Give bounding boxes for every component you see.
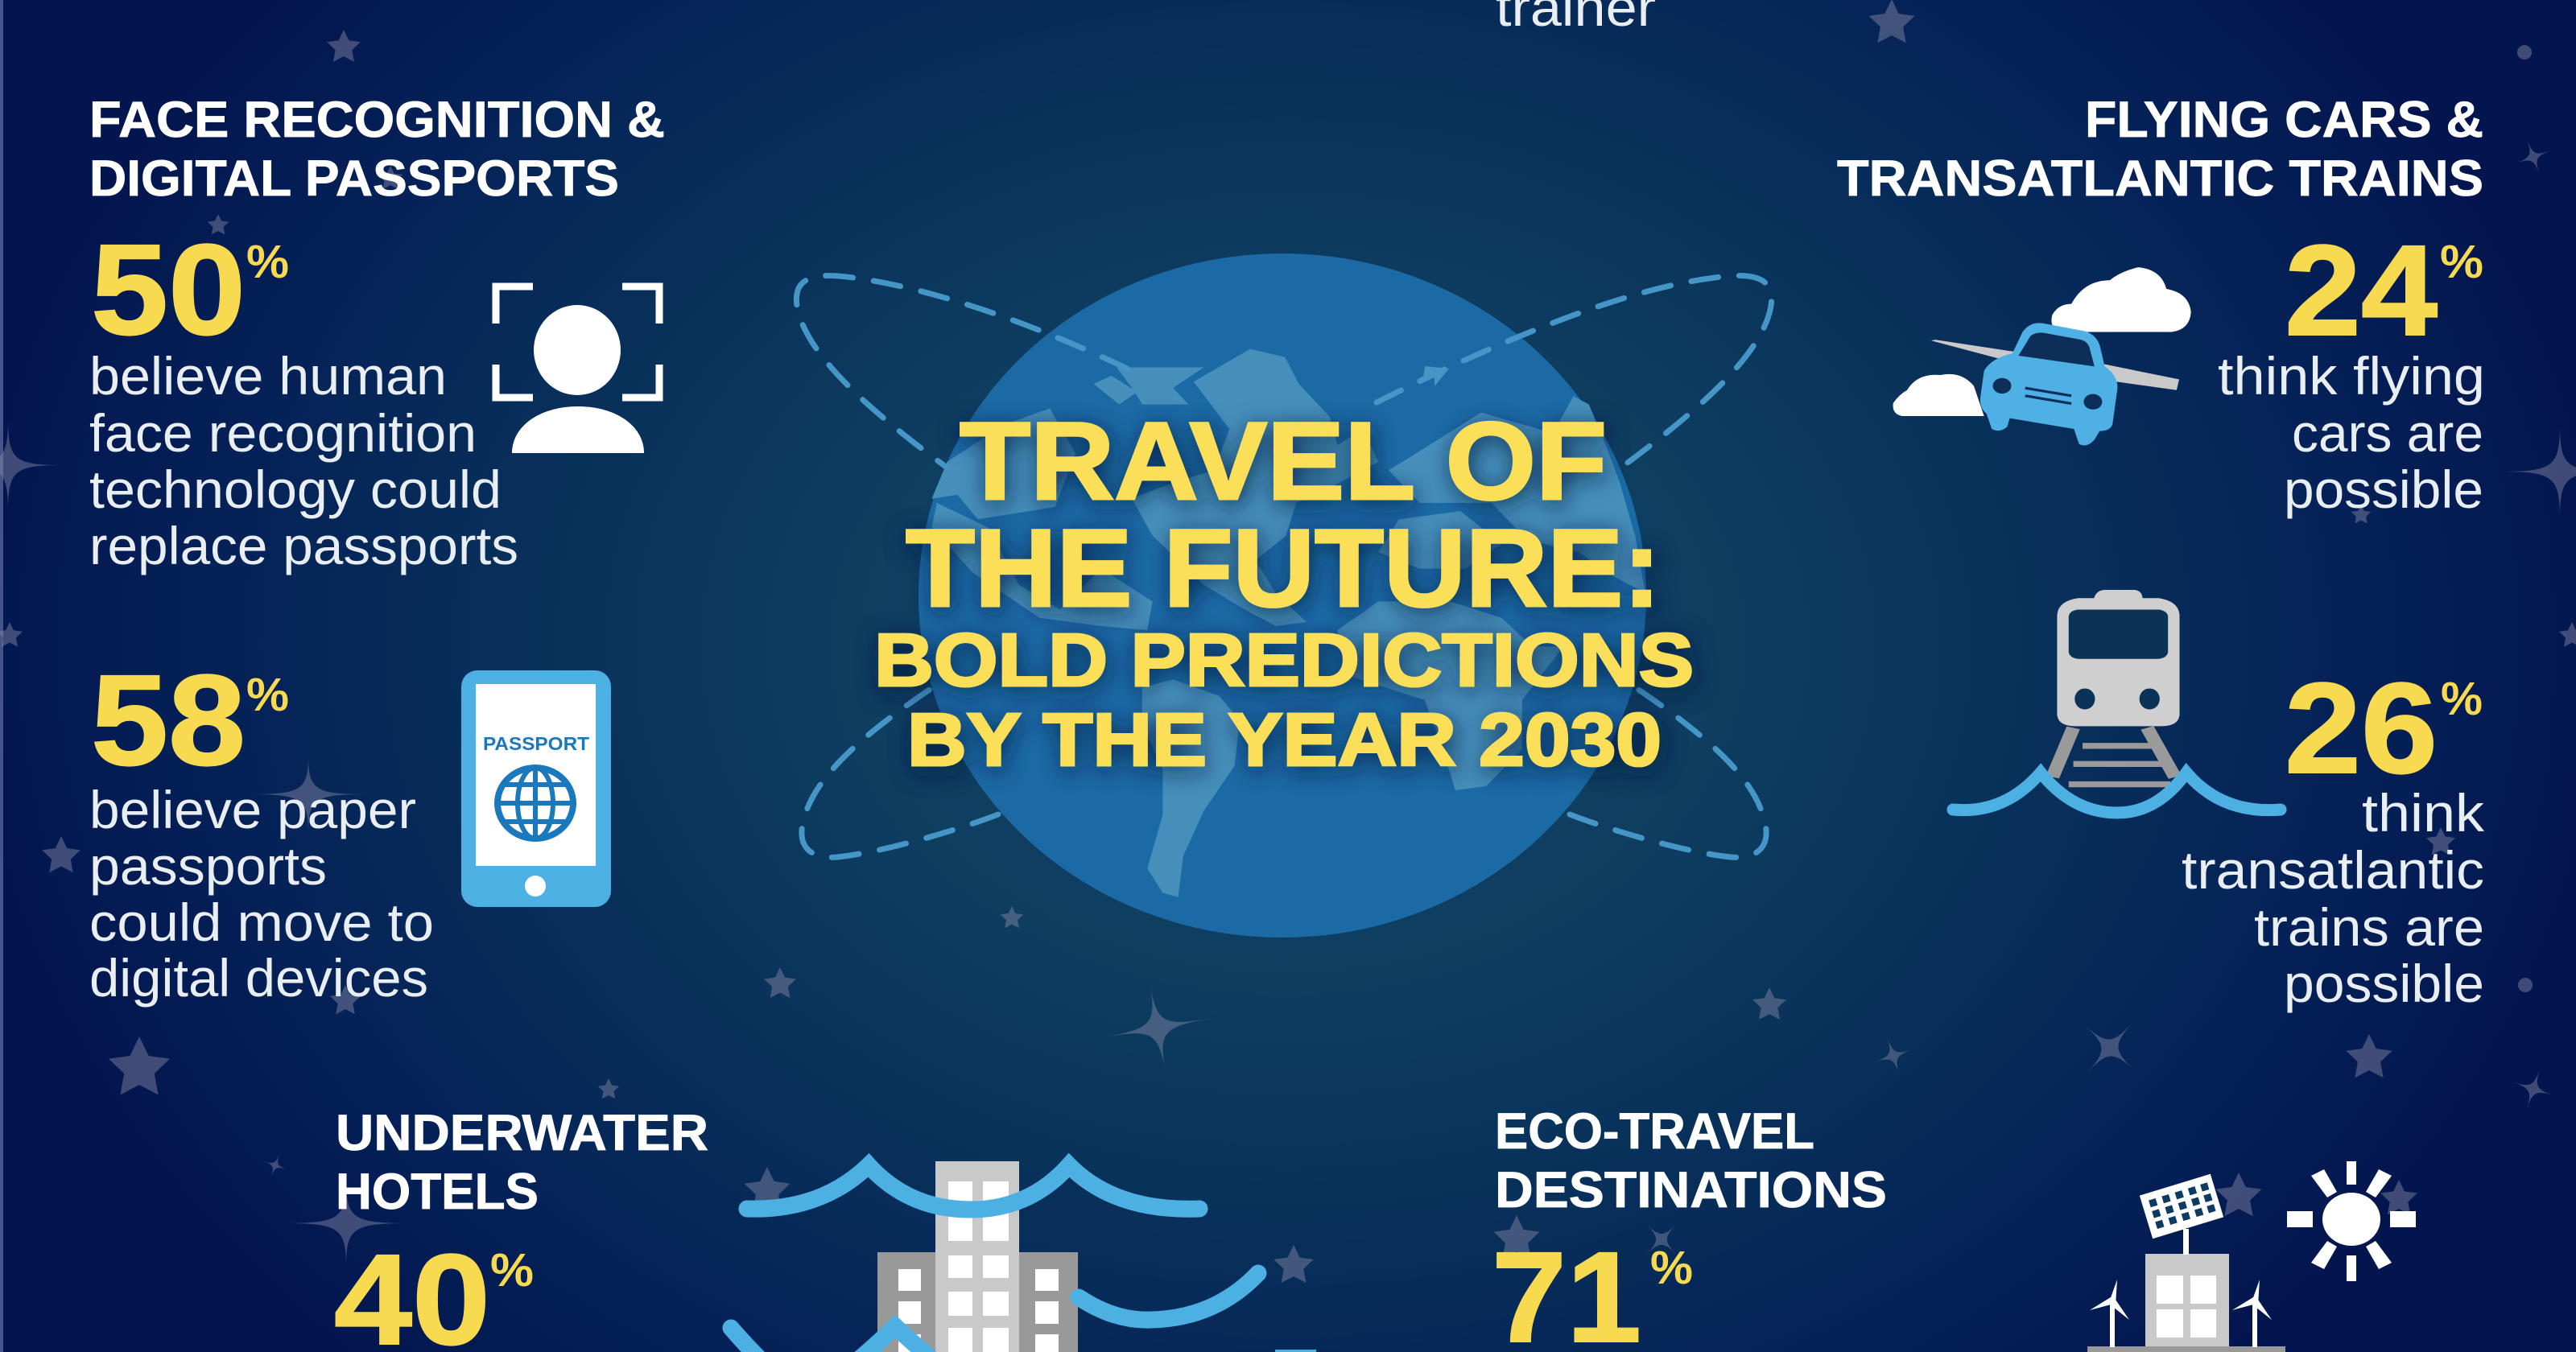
icon: phone passport: PASSPORT bbox=[483, 733, 589, 754]
title: BOLD PREDICTIONS bbox=[874, 618, 1694, 702]
heading bbox=[1837, 92, 2483, 207]
text: transatlantic trains description bbox=[2182, 783, 2485, 1013]
text: flying cars description: possible bbox=[2284, 460, 2483, 519]
text: digital passport description bbox=[89, 780, 434, 1008]
title: BY THE YEAR 2030 bbox=[907, 698, 1662, 781]
text: flying cars description bbox=[2218, 346, 2485, 519]
heading: FACE RECOGNITION & bbox=[89, 92, 665, 148]
icon: train on waves bbox=[1953, 590, 2281, 813]
text: face recognition description: technology could bbox=[89, 460, 502, 519]
heading: UNDERWATER bbox=[336, 1105, 708, 1161]
world map continents bbox=[931, 349, 1645, 897]
stat: 24 percent: 24 bbox=[2285, 218, 2438, 362]
text: face recognition description: face recognition bbox=[89, 403, 477, 463]
icon: flying car with clouds bbox=[1893, 267, 2191, 446]
text: face recognition description bbox=[89, 346, 518, 575]
stat: 58 percent: % bbox=[246, 669, 289, 721]
stat: 50 percent: % bbox=[246, 236, 289, 288]
title: THE FUTURE: bbox=[906, 507, 1661, 630]
heading: HOTELS bbox=[336, 1164, 539, 1220]
panel: globe with orbits bbox=[796, 254, 1772, 938]
panel: face recognition and digital passports bbox=[89, 92, 665, 1008]
icon: underwater hotel bbox=[731, 1161, 1316, 1352]
panel: eco-travel destinations bbox=[1492, 1103, 2416, 1352]
stat: 40 percent: % bbox=[490, 1244, 534, 1296]
icon: eco building with solar panel and wind turbines bbox=[2087, 1174, 2285, 1352]
text: digital passport description: believe paper bbox=[89, 780, 416, 839]
stat: 24 percent: % bbox=[2440, 236, 2483, 288]
text: flying cars description: think flying bbox=[2218, 346, 2485, 406]
heading bbox=[1495, 1103, 1887, 1218]
panel: underwater hotels bbox=[334, 1105, 1316, 1352]
text: face recognition description: replace passports bbox=[89, 516, 518, 575]
text: digital passport description: passports bbox=[89, 836, 327, 896]
text: digital passport description: could move to bbox=[89, 892, 434, 952]
heading: DESTINATIONS bbox=[1495, 1162, 1887, 1218]
text: digital passport description: digital devices bbox=[89, 948, 428, 1008]
heading: DIGITAL PASSPORTS bbox=[89, 150, 619, 207]
icon: sun bbox=[2287, 1161, 2416, 1281]
globe disc bbox=[919, 254, 1646, 938]
stat: 50 percent: 50 bbox=[91, 217, 246, 361]
heading: TRANSATLANTIC TRAINS bbox=[1837, 150, 2483, 207]
title: TRAVEL OF bbox=[960, 400, 1607, 523]
text: transatlantic trains description: think bbox=[2362, 783, 2485, 843]
stat: 71 percent: % bbox=[1650, 1242, 1693, 1294]
text: transatlantic trains description: possible bbox=[2284, 954, 2484, 1013]
panel: flying cars and transatlantic trains bbox=[1837, 92, 2485, 1013]
title bbox=[874, 400, 1694, 781]
text: flying cars description: cars are bbox=[2292, 403, 2483, 463]
heading: ECO-TRAVEL bbox=[1495, 1103, 1814, 1160]
heading bbox=[89, 92, 665, 207]
text: transatlantic trains description: trains are bbox=[2254, 897, 2484, 957]
heading: FLYING CARS & bbox=[2085, 92, 2483, 148]
text: transatlantic trains description: transatlantic bbox=[2182, 840, 2484, 900]
text: face recognition description: believe human bbox=[89, 346, 447, 406]
icon: plane arrow on orbit bbox=[1423, 366, 1449, 386]
dashed orbit paths bbox=[796, 276, 1772, 857]
heading bbox=[336, 1105, 708, 1220]
stat: 26 percent: % bbox=[2441, 673, 2483, 725]
stat: 26 percent: 26 bbox=[2285, 656, 2438, 800]
icon: phone passport bbox=[461, 670, 611, 907]
stat: 58 percent: 58 bbox=[91, 648, 246, 792]
icon: face scan bbox=[496, 286, 659, 453]
